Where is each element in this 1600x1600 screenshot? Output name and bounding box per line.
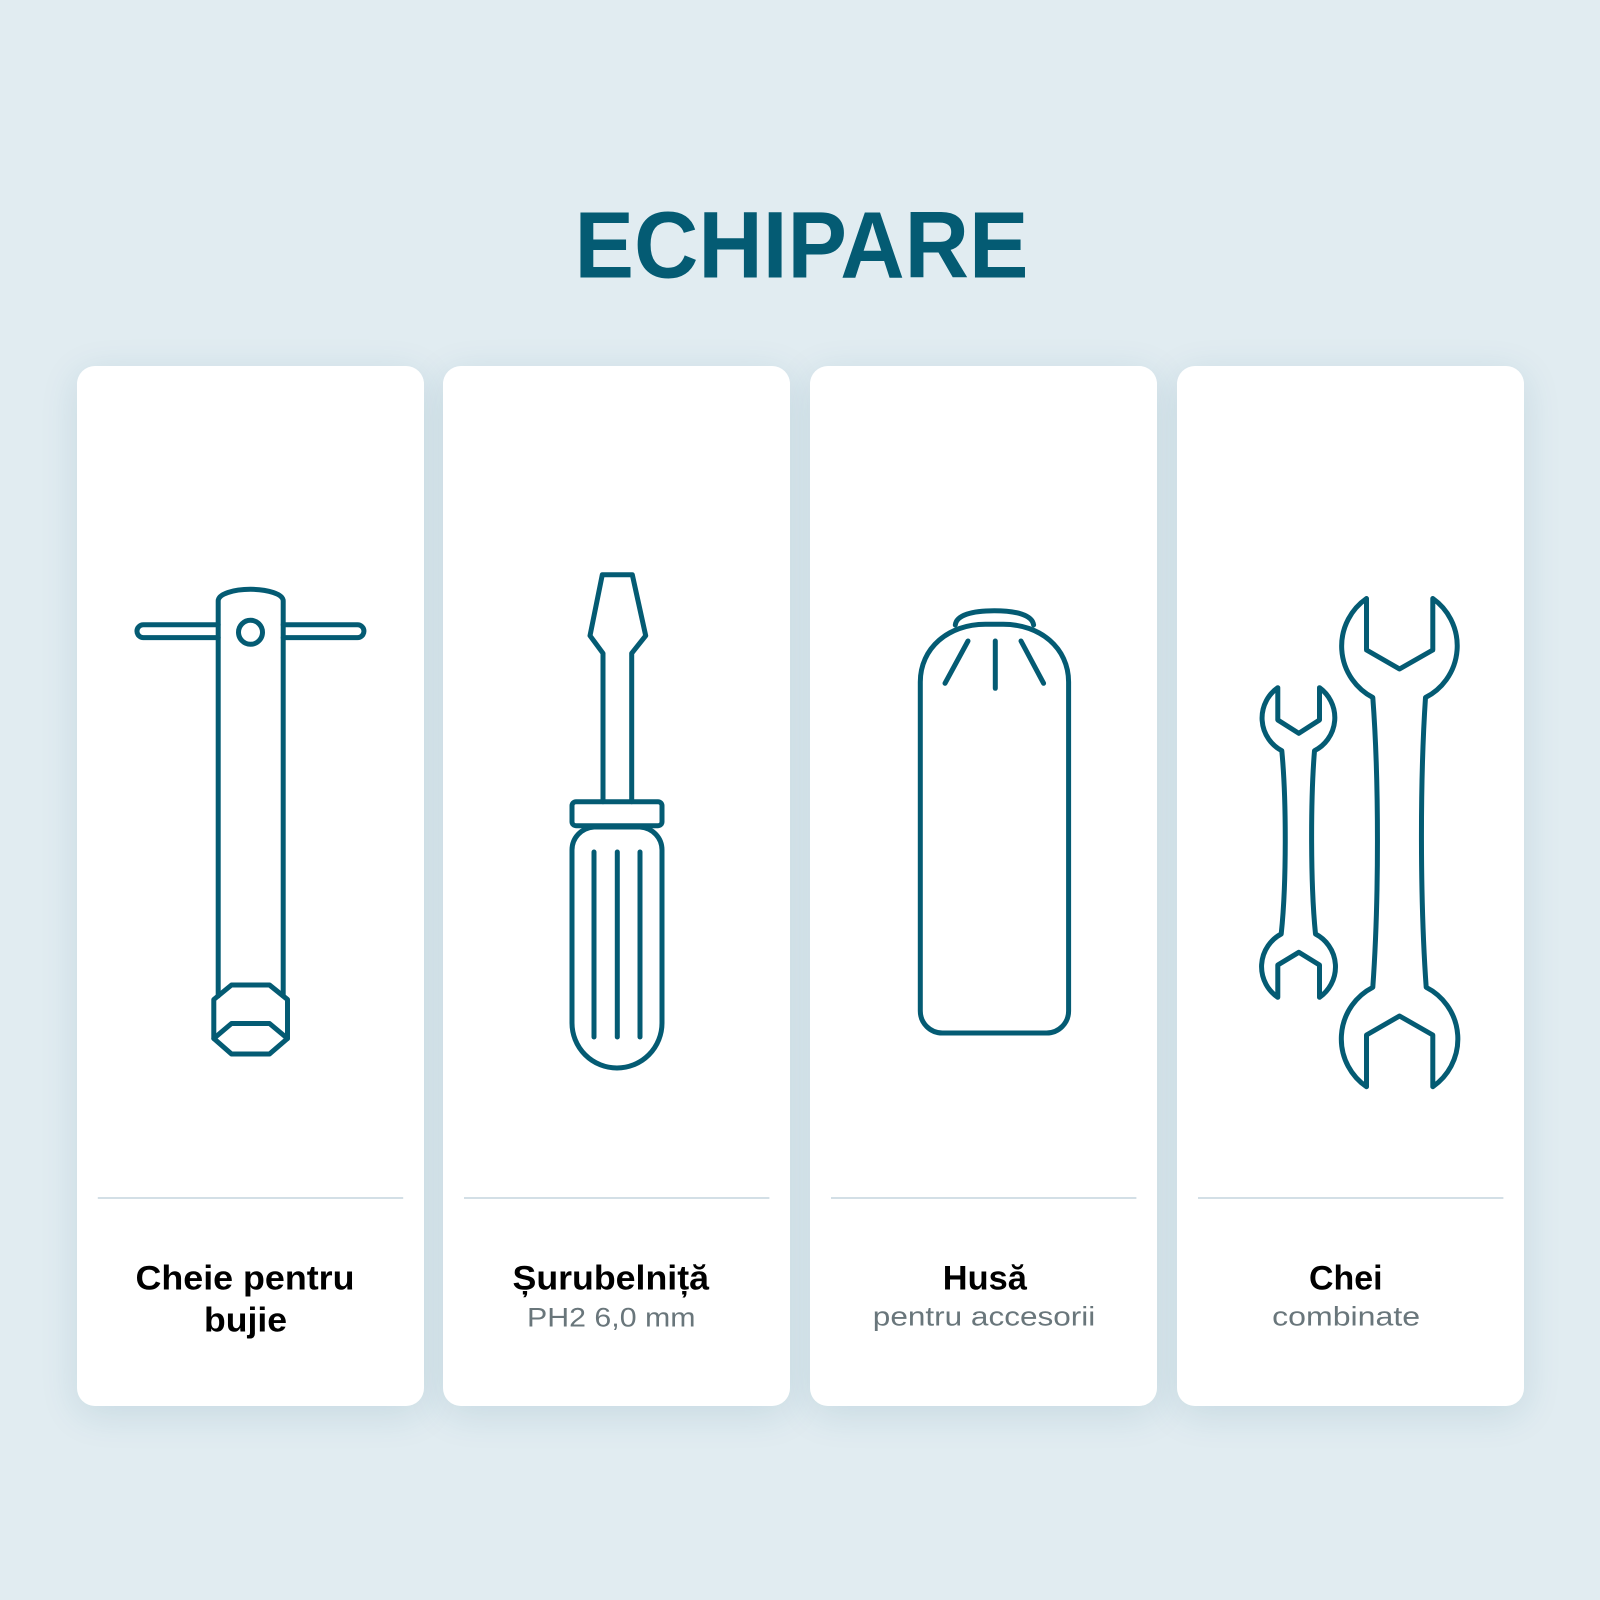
panel: spark plug wrench <box>76 366 424 1406</box>
panel: screwdriver <box>443 366 790 1406</box>
label: spark plug wrench <box>135 1259 354 1340</box>
icon: combination wrenches <box>1261 598 1457 1087</box>
label: screwdriver: Șurubelniță <box>512 1259 710 1297</box>
label: spark plug wrench: Cheie pentru <box>135 1259 354 1297</box>
label: accessory pouch: pentru accesorii <box>872 1302 1095 1332</box>
label: spark plug wrench: bujie <box>204 1302 286 1340</box>
label: combination wrenches <box>1272 1259 1420 1332</box>
label: accessory pouch <box>872 1259 1095 1332</box>
label: screwdriver <box>512 1259 710 1333</box>
label: screwdriver: PH2 6,0 mm <box>527 1303 696 1333</box>
label: combination wrenches: Chei <box>1308 1259 1382 1297</box>
panel: accessory pouch <box>810 366 1157 1406</box>
label: combination wrenches: combinate <box>1272 1302 1420 1332</box>
panel: combination wrenches <box>1176 366 1524 1406</box>
icon: spark plug wrench <box>136 589 363 1054</box>
icon: screwdriver <box>572 575 662 1068</box>
icon: accessory pouch <box>920 611 1068 1033</box>
label: accessory pouch: Husă <box>942 1259 1028 1297</box>
